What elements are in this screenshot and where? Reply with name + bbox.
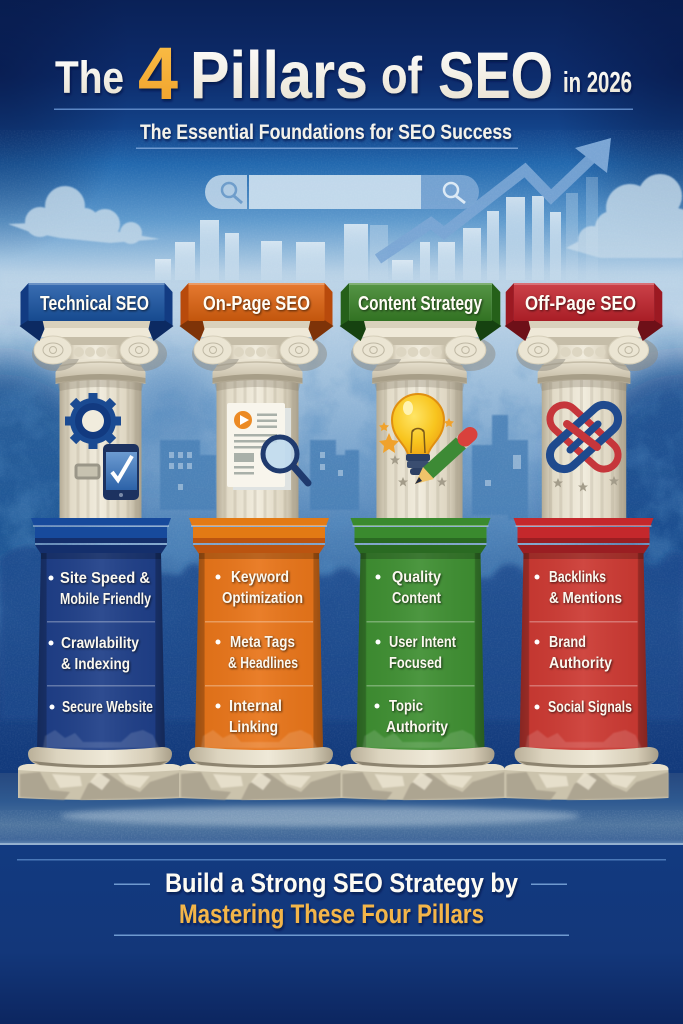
pedestal bullet list: Quality	[392, 569, 441, 586]
icon: chain links	[544, 399, 624, 475]
pedestal bullet list: Crawlability	[61, 635, 139, 652]
banner label: On-Page SEO	[203, 293, 310, 315]
capital	[351, 321, 495, 371]
mottled paint texture	[0, 320, 683, 564]
footer line two: Mastering These Four Pillars	[179, 899, 484, 929]
title: Pillars	[190, 38, 368, 113]
banner label: Content Strategy	[358, 293, 483, 315]
column shaft	[372, 356, 467, 518]
capital	[516, 321, 658, 371]
banner label: Technical SEO	[40, 293, 149, 315]
pedestal bullet list: Mobile Friendly	[60, 591, 151, 608]
pedestal bullet list: Linking	[229, 719, 278, 736]
pedestal bullet list: Authority	[386, 719, 448, 736]
banner ribbon	[340, 283, 501, 341]
banner ribbon	[505, 283, 663, 341]
background bar chart	[155, 138, 611, 280]
pillar 1: Technical SEO	[18, 283, 182, 800]
pedestal bullet list: Content	[392, 590, 442, 607]
pedestal bullet list: & Headlines	[228, 655, 298, 672]
clouds	[8, 174, 683, 258]
pedestal bullet list: Site Speed &	[60, 570, 150, 587]
pedestal bullet list: Internal	[229, 698, 282, 715]
haze over base of skyline	[0, 274, 683, 290]
pedestal bullet list: Social Signals	[548, 699, 632, 716]
dark tree line	[0, 546, 683, 720]
title	[55, 32, 632, 115]
column base	[340, 747, 504, 800]
title: of	[381, 47, 423, 105]
pedestal	[350, 518, 490, 750]
column shaft	[56, 356, 146, 518]
pedestal bullet list: & Indexing	[61, 656, 130, 673]
pedestal bullet list: Backlinks	[549, 569, 606, 586]
column shaft	[212, 356, 302, 518]
search bar	[205, 175, 479, 209]
cloud: left	[8, 186, 160, 244]
pillar 4: Off-Page SEO	[504, 283, 668, 800]
pedestal	[514, 518, 654, 750]
faded city skyline	[160, 415, 528, 520]
pedestal bullet list: Authority	[549, 655, 612, 672]
pedestal bullet list	[48, 570, 153, 716]
title: The	[55, 52, 124, 103]
banner label: Off-Page SEO	[525, 293, 636, 315]
pedestal bullet list: Focused	[389, 655, 442, 672]
atmospheric shading	[0, 0, 683, 600]
pedestal bullet list	[534, 569, 632, 716]
title: 4	[138, 32, 178, 115]
pedestal bullet list: Secure Website	[62, 699, 153, 716]
pedestal bullet list: Optimization	[222, 590, 303, 607]
pedestal bullet list: Meta Tags	[230, 634, 295, 651]
pedestal bullet list: Brand	[549, 634, 586, 651]
column base	[179, 747, 343, 800]
capital	[192, 321, 327, 371]
icon: gear	[65, 393, 121, 449]
footer line one: Build a Strong SEO Strategy by	[165, 868, 518, 898]
column base	[18, 747, 182, 800]
cloud: right	[566, 174, 683, 258]
pedestal bullet list	[216, 569, 303, 736]
column shaft	[538, 356, 630, 518]
banner ribbon	[180, 283, 334, 341]
capital	[32, 321, 167, 371]
icon: phone with check	[103, 444, 139, 500]
pedestal	[31, 518, 171, 750]
growth arrow	[378, 138, 611, 259]
banner ribbon	[20, 283, 174, 341]
subtitle: The Essential Foundations for SEO Success	[140, 121, 512, 144]
icon: document with magnifier	[227, 403, 308, 490]
decorative stone stars	[553, 476, 619, 492]
pedestal bullet list: Topic	[389, 698, 423, 715]
pedestal bullet list	[374, 569, 457, 736]
title: in 2026	[563, 67, 632, 99]
pedestal bullet list: & Mentions	[549, 590, 622, 607]
pedestal bullet list: User Intent	[389, 634, 457, 651]
grain texture	[0, 130, 683, 770]
title: SEO	[438, 38, 553, 112]
floor	[0, 773, 683, 845]
pedestal	[189, 518, 329, 750]
building windows	[169, 452, 521, 490]
icon: small tag	[76, 465, 99, 478]
pedestal bullet list: Keyword	[231, 569, 289, 586]
pillar 2: On-Page SEO	[179, 283, 343, 800]
footer panel	[0, 845, 683, 1024]
pillar 3: Content Strategy	[340, 283, 504, 800]
icon: light bulb with pencil	[379, 394, 470, 484]
column base	[504, 747, 668, 800]
decorative stone stars	[390, 455, 447, 486]
